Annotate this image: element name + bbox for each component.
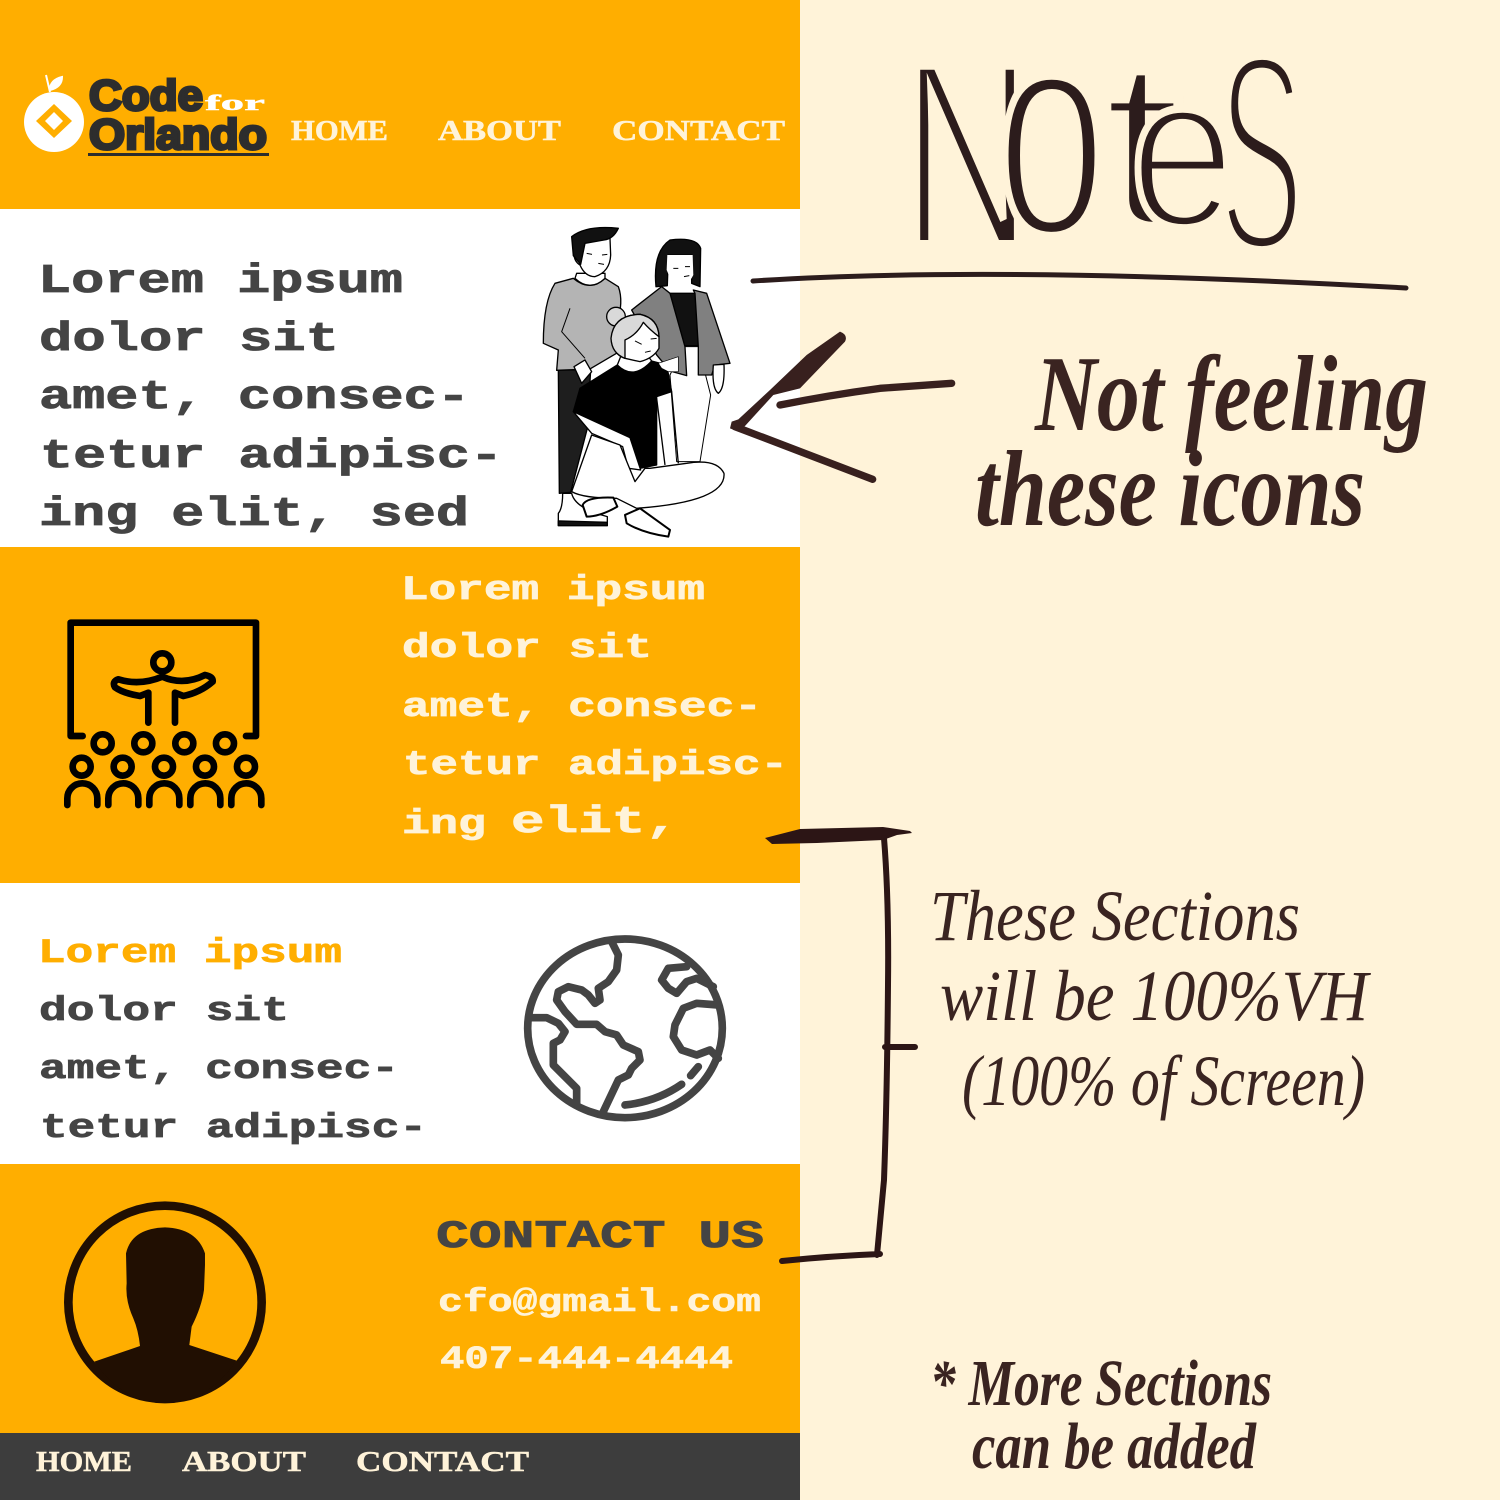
intro text — [38, 259, 503, 538]
icon: profile silhouette — [68, 1206, 262, 1403]
arrow pointing at icons — [730, 332, 952, 479]
intro text: dolor sit — [39, 317, 339, 363]
contact details: cfo@gmail.com — [438, 1284, 761, 1321]
global text: amet, consec- — [39, 1051, 399, 1089]
handwritten heading: Notes: e — [1130, 30, 1235, 273]
handwritten note: sections height: (100% of Screen) — [962, 1041, 1365, 1121]
contact details: 407-444-4444 — [440, 1341, 733, 1378]
navigation links: ABOUT — [438, 116, 561, 147]
global text — [38, 935, 427, 1148]
intro text: Lorem ipsum — [38, 259, 403, 305]
contact details — [436, 1215, 764, 1378]
panel: footer navigation: HOME — [36, 1447, 132, 1478]
logo — [24, 72, 269, 159]
handwritten note: icons: these icons — [975, 430, 1365, 549]
contact details: CONTACT US — [436, 1215, 764, 1259]
illustration: three people — [543, 228, 730, 537]
presentation text — [401, 572, 788, 844]
handwritten note: more sections — [930, 1347, 1272, 1483]
handwritten note: more sections: * More Sections — [930, 1347, 1272, 1420]
global text: Lorem ipsum — [38, 935, 342, 973]
intro text: ing elit, sed — [39, 492, 469, 538]
presentation text: tetur adipisc- — [403, 747, 788, 785]
panel: contact section — [0, 1164, 800, 1433]
bracket around sections — [765, 827, 915, 1261]
notes background — [800, 0, 1500, 1500]
presentation text: elit, — [511, 801, 679, 844]
panel: global section — [0, 883, 800, 1164]
handwritten note: icons — [975, 335, 1428, 549]
icon: globe — [528, 939, 722, 1118]
handwritten note: sections height — [930, 876, 1372, 1121]
navigation links — [291, 116, 785, 147]
presentation text: amet, consec- — [402, 689, 762, 727]
heading underline — [753, 274, 1406, 288]
presentation text: Lorem ipsum — [401, 572, 705, 610]
panel: footer navigation — [0, 1433, 800, 1500]
logo: Code — [89, 72, 203, 120]
handwritten note: more sections: can be added — [972, 1410, 1257, 1483]
handwritten heading: Notes: N — [902, 8, 1032, 301]
icon: presenter and audience — [67, 623, 261, 805]
panel: footer navigation: CONTACT — [356, 1447, 529, 1478]
panel: presentation section — [0, 547, 800, 883]
panel: intro section — [0, 209, 800, 547]
panel: header — [0, 0, 800, 209]
presentation text: ing — [402, 806, 486, 844]
handwritten heading: Notes — [902, 0, 1305, 330]
logo: for — [205, 90, 265, 115]
presentation text: dolor sit — [402, 630, 652, 668]
intro text: amet, consec- — [39, 375, 470, 421]
global text: dolor sit — [39, 993, 289, 1031]
handwritten note: sections height: will be 100%VH — [940, 956, 1372, 1036]
navigation links: HOME — [291, 116, 388, 147]
handwritten note: sections height: These Sections — [930, 876, 1300, 956]
panel: footer navigation: ABOUT — [182, 1447, 306, 1478]
navigation links: CONTACT — [612, 116, 785, 147]
intro text: tetur adipisc- — [40, 434, 503, 480]
handwritten heading: Notes: t — [1102, 11, 1183, 275]
global text: tetur adipisc- — [40, 1110, 427, 1148]
logo: Orlando — [89, 111, 267, 159]
